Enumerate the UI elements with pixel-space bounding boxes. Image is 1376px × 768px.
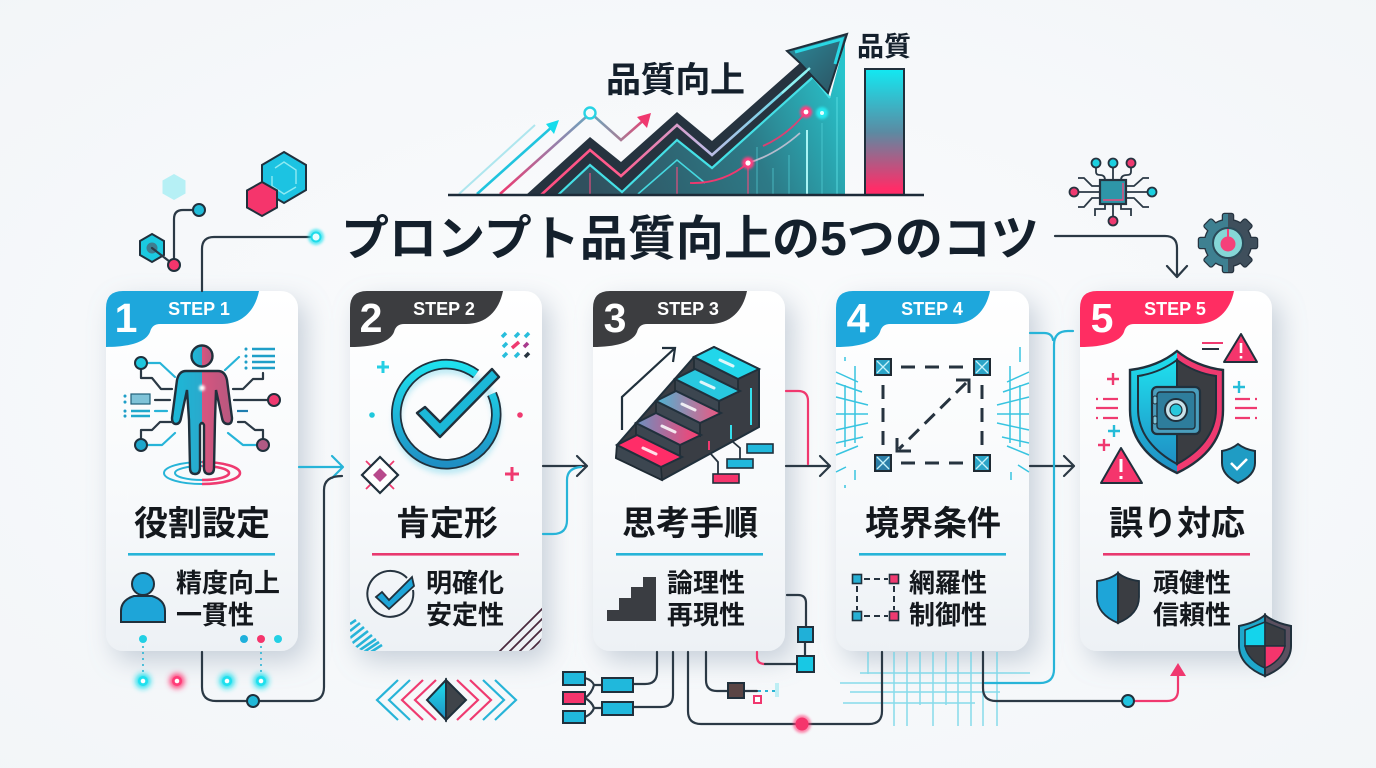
step 2 badge [350,291,503,347]
step 3 badge: 3 [604,295,626,341]
arrow: title to step 5 [1055,236,1187,277]
step 1 badge: 1 [115,295,137,341]
step 4 badge: 4 [847,295,870,341]
benefits: 頑健性 [1153,568,1231,598]
benefits [426,568,504,630]
benefits: 精度向上 [176,568,280,598]
heading: 役割設定 [134,505,270,543]
benefits: 一貫性 [176,600,254,630]
infographic canvas [99,32,1295,734]
benefits: 制御性 [909,600,987,630]
connector: right blocks of card 3 [757,595,814,672]
icon: user [121,573,165,622]
decorative hexagons and nodes, top left [140,152,306,271]
icon: small check [367,571,414,617]
arrow: step 1 to step 2 [299,456,343,478]
chart: quality growth [448,32,924,195]
connector cluster: below card 3 left [563,652,673,723]
arrow: step 2 to step 3 [543,456,587,476]
benefits [667,568,745,630]
benefits [909,568,987,630]
chevron diamond ornament [377,680,516,720]
label: quality improvement: 品質向上 [606,61,745,100]
connector: card 1 to title [202,229,324,291]
card 4: boundary conditions [836,291,1029,651]
step 4 badge: STEP 4 [901,299,963,319]
icon: shield with safe [1096,334,1257,483]
step 5 badge: STEP 5 [1144,299,1206,319]
step 2 badge: 2 [360,295,382,341]
icon: small dashed box [852,574,898,620]
benefits [1153,568,1231,630]
chip icon [1070,158,1156,226]
arrow: step 4 to step 5 [1030,456,1074,476]
faint grid under card 4 [840,652,1030,726]
benefits: 安定性 [426,600,504,630]
card 2: positive form [350,291,544,652]
connector: long bottom line with pink node [688,652,882,733]
connector: card 2 to step 3 [543,467,581,534]
corner stripes [350,607,544,652]
main arrow head [782,34,847,93]
icon: bounded box with diagonal arrow [836,347,1029,488]
title: プロンプト品質向上の5つのコツ [341,213,1039,266]
step 4 badge [836,291,990,347]
gear icon [1199,214,1257,272]
icon: staircase [616,347,773,483]
step 1 badge: STEP 1 [168,299,230,319]
benefits: 論理性 [667,568,745,598]
baseline [448,194,924,196]
thin rising arrows [459,108,651,194]
icon: small shield [1097,573,1139,623]
heading: 境界条件 [865,505,1001,543]
connector: card 4 to card 5 bottom arrow [983,652,1186,707]
step 3 badge [593,291,747,347]
heading: 肯定形 [396,505,498,543]
step 5 badge: 5 [1091,295,1113,341]
icon: small stairs [607,577,656,621]
arrow: step 3 to step 4 [786,456,830,476]
benefits: 明確化 [426,568,504,598]
step 3 badge: STEP 3 [657,299,719,319]
connector: card 1 bottom loop [202,476,342,707]
heading: 誤り対応 [1109,505,1245,543]
benefits: 再現性 [667,600,745,630]
connector: pink link [786,391,808,464]
step 5 badge [1080,291,1234,347]
quality bar [865,69,904,195]
card 5: error handling [1080,291,1272,651]
icon: check circle [362,333,529,493]
label: quality: 品質 [857,32,911,62]
icon: person with circuits [125,346,280,484]
card 1 status dots [136,635,282,688]
step 1 badge [106,291,259,347]
benefits [176,568,280,630]
card 1: role setting [106,291,298,651]
zigzag growth area [526,40,845,195]
connector: small node chain [706,652,779,703]
step 2 badge: STEP 2 [413,299,475,319]
heading: 思考手順 [622,505,758,543]
corner shield [1239,615,1291,676]
card 3: thinking steps [593,291,785,651]
benefits: 信頼性 [1153,600,1231,630]
connector: cyan riser to step 5 [985,331,1073,683]
benefits: 網羅性 [909,568,987,598]
